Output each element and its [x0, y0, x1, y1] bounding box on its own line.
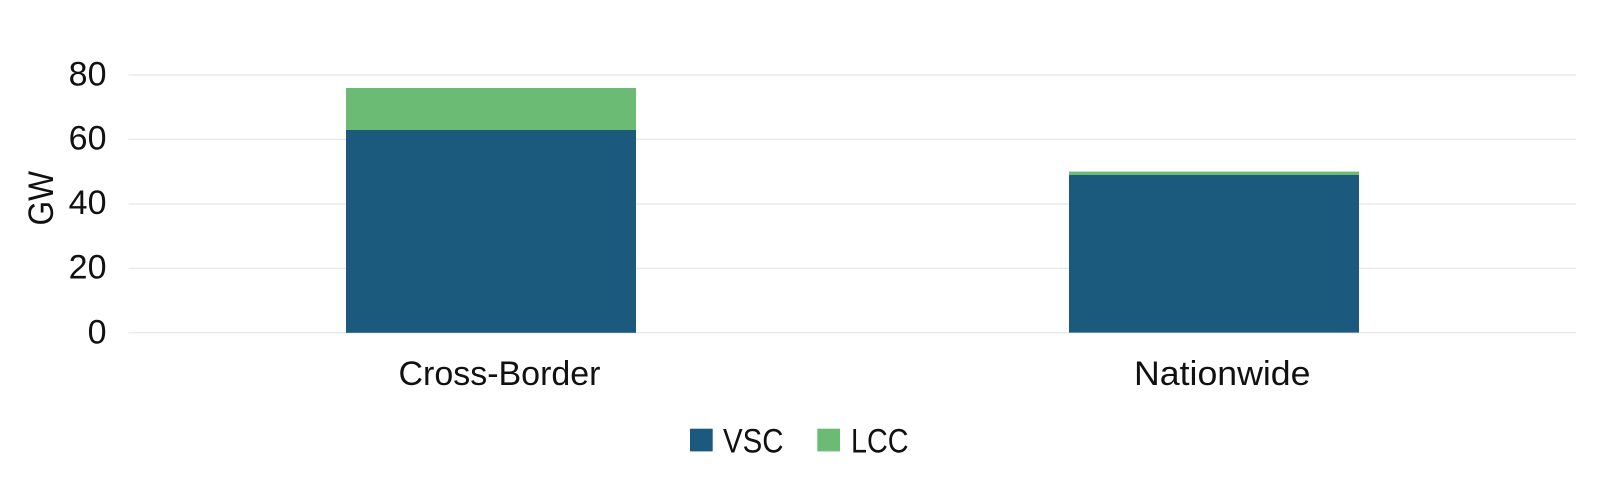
- x axis category labels: Nationwide: [1134, 355, 1310, 393]
- x axis category labels: Cross-Border: [398, 355, 600, 393]
- y axis tick labels: 0: [88, 314, 106, 352]
- bar: Cross-Border: [346, 88, 636, 333]
- legend: [690, 422, 908, 460]
- legend: VSC: [723, 422, 784, 460]
- y axis title: GW: [22, 171, 61, 226]
- y axis tick labels: 80: [69, 56, 106, 94]
- x axis category labels: [398, 355, 1310, 393]
- y axis tick labels: 60: [69, 120, 106, 158]
- y axis tick labels: 40: [69, 184, 106, 222]
- bar: Nationwide: [1069, 172, 1359, 333]
- y axis tick labels: 20: [69, 248, 106, 286]
- y axis tick labels: [69, 56, 106, 352]
- legend: LCC: [851, 422, 908, 460]
